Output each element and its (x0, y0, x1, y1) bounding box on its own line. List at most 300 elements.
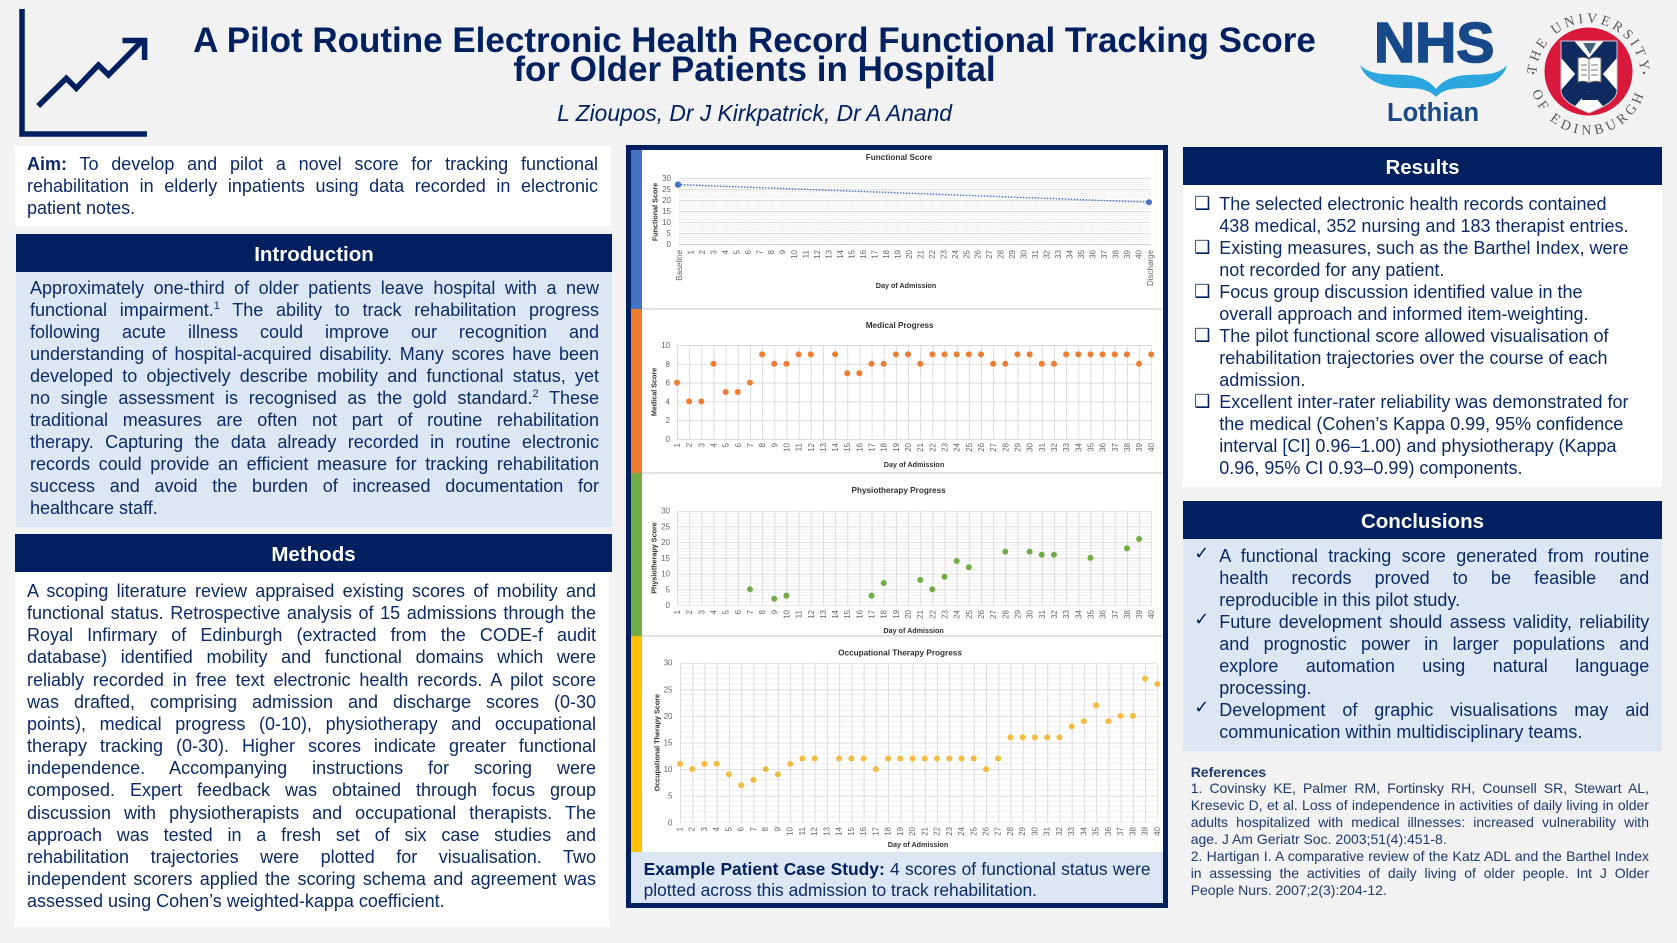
text: conclusions list: explore automation using natural language (1219, 656, 1649, 676)
x axis labels: 39 (1135, 442, 1144, 452)
x axis labels: 39 (1141, 826, 1150, 836)
axis title: day of admission: Day of Admission (884, 460, 944, 469)
x axis labels: 6 (737, 826, 746, 831)
x axis labels: 3 (697, 609, 706, 614)
x axis labels: 30 (1026, 442, 1035, 452)
chart: medical progress (631, 309, 1156, 473)
data: medical score points (674, 351, 1154, 404)
text: methods body (27, 581, 596, 911)
x axis labels: 32 (1043, 249, 1052, 259)
logo: NHS Lothian: Lothian (1387, 99, 1479, 127)
x axis labels: Baseline (675, 249, 684, 281)
panel: conclusions: ✓ (1194, 697, 1209, 718)
x axis labels: 23 (945, 826, 954, 836)
text: results list: the medical (Cohen’s Kappa 0.99, 95% confidence (1219, 414, 1623, 434)
panel: results: ❑ (1194, 280, 1210, 302)
x axis labels: 9 (773, 826, 782, 831)
x axis labels: 35 (1092, 826, 1101, 836)
x axis labels: 27 (989, 442, 998, 452)
title (193, 21, 1316, 88)
text: aim statement (27, 154, 598, 218)
text: conclusions list: Future development should assess validity, reliability (1219, 612, 1649, 632)
x axis labels: 19 (892, 442, 901, 452)
x axis labels: 1 (673, 442, 682, 447)
x axis labels: 13 (822, 826, 831, 836)
y axis labels: 30 (661, 507, 671, 516)
text: aim statement: rehabilitation in elderly inpatients using data recorded in electronic (27, 176, 598, 196)
y axis labels: 0 (666, 601, 671, 610)
x axis labels: 29 (1018, 826, 1027, 836)
x axis labels: 20 (904, 442, 913, 452)
x axis labels: 24 (953, 442, 962, 452)
x axis labels: 25 (965, 609, 974, 619)
axis title: medical score: Medical Score (650, 368, 658, 416)
x axis labels: 28 (1006, 826, 1015, 836)
y axis labels: 10 (661, 341, 671, 350)
x axis labels: 37 (1116, 826, 1125, 836)
text: conclusions list: A functional tracking score generated from routine (1219, 546, 1649, 566)
data: physiotherapy score points (747, 536, 1142, 602)
y axis labels (661, 507, 671, 610)
axis title: physiotherapy score: Physiotherapy Score (650, 522, 658, 594)
text: conclusions list: and prognostic power in larger populations and (1219, 634, 1649, 654)
x axis labels: 23 (941, 609, 950, 619)
x axis labels: 33 (1062, 442, 1071, 452)
axis title: functional score: Functional Score (650, 183, 660, 241)
axis title: day of admission: Day of Admission (888, 840, 948, 849)
text: results list: 438 medical, 352 nursing and 183 therapist entries. (1219, 216, 1629, 236)
colour strip: functional score (631, 150, 642, 309)
text: conclusions list (1194, 543, 1650, 742)
text: conclusions list: processing. (1219, 678, 1311, 698)
y axis labels: 25 (664, 685, 673, 694)
x axis labels: 9 (770, 609, 779, 614)
chart: functional score (631, 150, 1155, 309)
x axis labels: 15 (847, 826, 856, 836)
x axis labels: 3 (700, 826, 709, 831)
x axis labels: 23 (939, 249, 948, 259)
references: age. J Am Geriatr Soc. 2003;51(4):451-8. (1191, 831, 1447, 847)
x axis labels: 35 (1077, 249, 1086, 259)
text: results list: Excellent inter-rater reliability was demonstrated for (1219, 392, 1628, 412)
y axis labels: 6 (666, 379, 671, 388)
x axis labels (675, 249, 1155, 286)
y axis labels: 25 (661, 522, 671, 531)
y axis labels: 0 (667, 240, 672, 249)
text: results list: The selected electronic health records contained (1219, 194, 1607, 214)
x axis labels: 18 (880, 442, 889, 452)
y axis labels: 4 (666, 397, 671, 406)
x axis labels: 27 (985, 249, 994, 259)
text: conclusions list: communication within multidisciplinary teams. (1219, 722, 1582, 742)
text: introduction body: records could provide an efficient measure for tracking rehabilitation (30, 454, 599, 474)
x axis labels: 23 (941, 442, 950, 452)
heading: results: Results (1385, 156, 1460, 179)
x axis labels: 37 (1111, 609, 1120, 619)
x axis labels: Discharge (1146, 249, 1155, 286)
text: introduction body: Approximately one-third of older patients leave hospital with a new (30, 278, 599, 298)
x axis labels: 26 (977, 609, 986, 619)
x axis labels: 10 (782, 442, 791, 452)
x axis labels: 40 (1147, 442, 1156, 452)
x axis labels: 15 (843, 442, 852, 452)
title: A Pilot Routine Electronic Health Record Functional Tracking Score (193, 21, 1316, 60)
text: results list: interval [CI] 0.96–1.00) and physiotherapy (Kappa (1219, 436, 1617, 456)
heading: results (1183, 147, 1662, 185)
x axis labels: 7 (749, 826, 758, 831)
y axis labels: 30 (662, 174, 672, 183)
y axis labels: 2 (666, 416, 671, 425)
x axis labels: 14 (831, 442, 840, 452)
x axis labels: 11 (798, 826, 807, 835)
text: aim statement: patient notes. (27, 198, 135, 218)
x axis labels: 5 (722, 609, 731, 614)
axis title: day of admission: Day of Admission (883, 626, 944, 635)
text: methods body: therapy tracking (0-30). Higher scores indicate greater functional (27, 736, 596, 756)
text: results list: Focus group discussion identified value in the (1219, 282, 1583, 302)
data: occupational therapy score points (677, 676, 1160, 788)
x axis labels: 22 (928, 249, 937, 259)
x axis labels: 13 (824, 249, 833, 259)
x axis labels: 1 (673, 609, 682, 614)
x axis labels: 36 (1099, 442, 1108, 452)
x axis labels: 32 (1050, 442, 1059, 452)
x axis labels: 16 (855, 442, 864, 452)
x axis labels: 29 (1013, 442, 1022, 452)
x axis labels: 12 (813, 249, 822, 259)
logo: NHS Lothian: NHS (1374, 11, 1494, 75)
logo: NHS Lothian (1360, 11, 1507, 127)
x axis labels: 39 (1135, 609, 1144, 619)
x axis labels: 3 (697, 442, 706, 447)
x axis labels: 16 (859, 826, 868, 836)
x axis labels: 4 (709, 442, 718, 447)
text: results list: The pilot functional score allowed visualisation of (1219, 326, 1609, 346)
icon: rising line chart (19, 9, 148, 137)
x axis labels: 11 (795, 609, 804, 618)
x axis labels: 7 (746, 609, 755, 614)
panel: results: ❑ (1194, 236, 1210, 258)
x axis labels: 40 (1147, 609, 1156, 619)
heading: methods (15, 534, 612, 572)
chart title: medical progress: Medical Progress (866, 321, 934, 330)
heading: conclusions: Conclusions (1361, 510, 1484, 533)
references: 1. Covinsky KE, Palmer RM, Fortinsky RH, Counsell SR, Stewart AL, (1191, 780, 1649, 796)
x axis labels: 5 (732, 249, 741, 254)
authors: L Zioupos, Dr J Kirkpatrick, Dr A Anand (557, 100, 952, 126)
y axis labels: 5 (667, 229, 672, 238)
text: methods body: independence. Accompanying instructions for scoring were (27, 758, 596, 778)
x axis labels: 16 (855, 609, 864, 619)
x axis labels: 17 (868, 442, 877, 452)
text: methods body: discussion with physiotherapists and occupational therapists. The (27, 803, 596, 823)
x axis labels: 17 (868, 609, 877, 619)
x axis labels: 11 (795, 442, 804, 451)
chart title: physiotherapy progress: Physiotherapy Progress (851, 486, 946, 495)
text: conclusions list: reproducible in this pilot study. (1219, 590, 1460, 610)
x axis labels: 30 (1030, 826, 1039, 836)
x axis labels: 24 (951, 249, 960, 259)
x axis labels: 14 (836, 249, 845, 259)
x axis labels: 19 (892, 609, 901, 619)
text: introduction body: healthcare staff. (30, 498, 158, 518)
x axis labels: 19 (896, 826, 905, 836)
x axis labels: 2 (698, 249, 707, 254)
references: References (1191, 764, 1266, 780)
x axis labels: 8 (758, 442, 767, 447)
y axis labels: 15 (661, 554, 671, 563)
callout: example patient case study caption: Example Patient Case Study: 4 scores of functional status were (644, 859, 1151, 879)
x axis labels (673, 609, 1156, 619)
x axis labels: 9 (778, 249, 787, 254)
text: methods body: was drafted, comprising admission and discharge scores (0-30 (27, 692, 596, 712)
x axis labels: 4 (721, 249, 730, 254)
x axis labels: 26 (982, 826, 990, 836)
x axis labels: 18 (880, 609, 889, 619)
colour strip: occupational therapy (631, 636, 642, 852)
x axis labels: 29 (1013, 609, 1022, 619)
x axis labels: 20 (908, 826, 917, 836)
chart: occupational therapy progress (631, 636, 1162, 852)
chart title: functional score: Functional Score (866, 153, 933, 162)
x axis labels: 29 (1008, 249, 1017, 259)
text: introduction body: functional impairment.1 The ability to track rehabilitation progress (30, 300, 599, 320)
x axis labels: 8 (761, 826, 770, 831)
x axis labels: 38 (1112, 249, 1121, 259)
x axis labels: 30 (1026, 609, 1035, 619)
references (1191, 764, 1649, 898)
x axis labels: 18 (884, 826, 893, 836)
text: results list: Existing measures, such as the Barthel Index, were (1219, 238, 1628, 258)
x axis labels: 5 (724, 826, 733, 831)
references: 2. Hartigan I. A comparative review of the Katz ADL and the Barthel Index (1191, 848, 1649, 864)
x axis labels: 1 (686, 249, 695, 254)
x axis labels: 26 (977, 442, 986, 452)
x axis labels: 2 (685, 609, 694, 614)
text: results list (1194, 192, 1629, 478)
x axis labels: 38 (1123, 442, 1132, 452)
x axis labels: 5 (722, 442, 731, 447)
x axis labels: 25 (962, 249, 971, 259)
x axis labels: 36 (1104, 826, 1113, 836)
x axis labels: 15 (847, 249, 856, 259)
logo: University of Edinburgh crest (1527, 13, 1650, 134)
text: results list: 0.96, 95% CI 0.93–0.99) components. (1219, 458, 1522, 478)
x axis labels: 21 (916, 249, 925, 259)
x axis labels: 25 (969, 826, 978, 836)
title: for Older Patients in Hospital (513, 50, 996, 88)
x axis labels: 11 (801, 249, 810, 258)
x axis labels: 37 (1100, 249, 1109, 259)
text: introduction body: no single assessment is recognised as the gold standard.2 These (30, 388, 599, 408)
x axis labels: 22 (928, 609, 937, 619)
y axis labels: 30 (664, 659, 673, 668)
data: functional score trend line and points (675, 181, 1152, 205)
x axis labels (673, 442, 1156, 452)
x axis labels: 24 (957, 826, 966, 836)
text: methods body: database) identified mobility and functional domains which were (27, 647, 596, 667)
text: methods body: points), medical progress (0-10), physiotherapy and occupational (27, 714, 596, 734)
x axis labels: 27 (989, 609, 998, 619)
panel: results: ❑ (1194, 390, 1210, 412)
y axis labels: 10 (664, 765, 673, 774)
y axis labels: 20 (662, 196, 672, 205)
x axis labels: 35 (1086, 609, 1095, 619)
text: introduction body: traditional measures are often not part of routine rehabilitation (30, 410, 599, 430)
x axis labels: 25 (965, 442, 974, 452)
panel: results: ❑ (1194, 192, 1210, 214)
x axis labels: 31 (1031, 249, 1040, 259)
text: introduction body (30, 278, 599, 518)
colour strip: medical (631, 309, 642, 473)
y axis labels: 20 (664, 712, 673, 721)
x axis labels: 33 (1054, 249, 1063, 259)
x axis labels: 40 (1135, 249, 1144, 259)
x axis labels: 28 (997, 249, 1006, 259)
y axis labels: 5 (666, 585, 671, 594)
x axis labels: 14 (835, 826, 844, 836)
panel: conclusions: ✓ (1194, 609, 1209, 630)
text: introduction body: following acute illness could improve our recognition and (30, 322, 599, 342)
x axis labels: 32 (1050, 609, 1059, 619)
panel: conclusions (1183, 501, 1662, 751)
x axis labels: 7 (755, 249, 764, 254)
x axis labels: 22 (933, 826, 942, 836)
text: methods body: composed. Expert feedback was obtained through focus group (27, 780, 596, 800)
text: conclusions list: Development of graphic visualisations may aid (1219, 700, 1649, 720)
x axis labels: 12 (810, 826, 819, 836)
x axis labels: 2 (685, 442, 694, 447)
x axis labels: 20 (905, 249, 914, 259)
x axis labels: 21 (920, 826, 929, 836)
references: in assessing the activities of daily living of older people. Int J Older (1191, 865, 1649, 881)
panel: methods (15, 534, 612, 927)
x axis labels: 39 (1123, 249, 1132, 259)
y axis labels: 10 (662, 218, 672, 227)
x axis labels: 17 (870, 249, 879, 259)
x axis labels: 2 (688, 826, 697, 831)
x axis labels: 40 (1153, 826, 1162, 836)
y axis labels (662, 174, 672, 249)
panel: conclusions: ✓ (1194, 543, 1209, 564)
x axis labels: 35 (1086, 442, 1095, 452)
x axis labels: 18 (882, 249, 891, 259)
x axis labels: 21 (916, 609, 925, 619)
x axis labels: 17 (871, 826, 880, 836)
x axis labels: 22 (928, 442, 937, 452)
x axis labels: 6 (734, 609, 743, 614)
panel: example patient case study charts (626, 145, 1168, 908)
x axis labels: 12 (807, 442, 816, 452)
y axis labels (661, 341, 671, 444)
text: introduction body: developed to objectively describe mobility and functional status, yet (30, 366, 599, 386)
x axis labels: 3 (709, 249, 718, 254)
x axis labels: 34 (1079, 826, 1088, 836)
text: introduction body: therapy. Capturing the data already recorded in routine electronic (30, 432, 599, 452)
x axis labels: 28 (1001, 442, 1010, 452)
colour strip: physiotherapy (631, 473, 642, 636)
x axis labels: 28 (1001, 609, 1010, 619)
panel: results: ❑ (1194, 324, 1210, 346)
x axis labels: 34 (1074, 442, 1083, 452)
text: results list: overall approach and informed item-weighting. (1219, 304, 1588, 324)
panel: aim (15, 146, 611, 226)
x axis labels: 19 (893, 249, 902, 259)
x axis labels: 27 (994, 826, 1003, 836)
heading: conclusions (1183, 501, 1662, 539)
x axis labels: 38 (1123, 609, 1132, 619)
x axis labels: 31 (1038, 609, 1047, 619)
x axis labels: 32 (1055, 826, 1064, 836)
y axis labels: 5 (668, 792, 673, 801)
x axis labels: 14 (831, 609, 840, 619)
y axis labels: 20 (661, 538, 671, 547)
text: conclusions list: health records proved to be feasible and (1219, 568, 1649, 588)
panel: results (1183, 147, 1662, 487)
x axis labels: 34 (1074, 609, 1083, 619)
panel: introduction (16, 234, 612, 527)
x axis labels: 4 (709, 609, 718, 614)
heading: introduction (16, 234, 612, 272)
x axis labels: 13 (819, 609, 828, 619)
x axis labels: 21 (916, 442, 925, 452)
x axis labels: 38 (1128, 826, 1137, 836)
x axis labels: 10 (786, 826, 795, 836)
y axis labels: 15 (664, 738, 673, 748)
callout: example patient case study caption (631, 852, 1163, 903)
x axis labels: 36 (1089, 249, 1098, 259)
text: methods body: reliably recorded in free text electronic health records. A pilot score (27, 670, 596, 690)
x axis labels: 6 (744, 249, 753, 254)
chart title: occupational therapy progress: Occupational Therapy Progress (838, 648, 962, 658)
x axis labels: 12 (807, 609, 816, 619)
heading: introduction: Introduction (254, 243, 374, 266)
text: methods body: rehabilitation trajectories were plotted for visualisation. Two (27, 847, 596, 867)
text: methods body: A scoping literature review appraised existing scores of mobility and (27, 581, 596, 601)
x axis labels: 15 (843, 609, 852, 619)
y axis labels (664, 659, 673, 827)
logo: University of Edinburgh crest: THE UNIVERSITY (1527, 13, 1650, 73)
x axis labels: 1 (676, 826, 684, 831)
y axis labels: 0 (666, 435, 671, 444)
x axis labels: 37 (1111, 442, 1120, 452)
x axis labels: 34 (1066, 249, 1075, 259)
text: methods body: approach was tested in a fresh set of six case studies and (27, 825, 596, 845)
text: introduction body: success and avoid the burden of increased documentation for (30, 476, 599, 496)
text: results list: not recorded for any patient. (1219, 260, 1444, 280)
text: methods body: assessed using Cohen’s weighted-kappa coefficient. (27, 891, 445, 911)
y axis labels: 0 (668, 818, 673, 827)
y axis labels: 8 (666, 360, 671, 369)
y axis labels: 10 (661, 570, 671, 579)
y axis labels: 25 (662, 185, 672, 194)
x axis labels: 24 (953, 609, 962, 619)
axis title: day of admission: Day of Admission (876, 281, 936, 290)
x axis labels: 36 (1099, 609, 1108, 619)
y axis labels: 15 (662, 207, 672, 216)
callout: example patient case study caption: plotted across this admission to track rehabilitation. (644, 880, 1037, 900)
x axis labels: 6 (734, 442, 743, 447)
text: methods body: functional status. Retrospective analysis of 15 admissions through the (27, 603, 596, 623)
text: aim statement: Aim: To develop and pilot a novel score for tracking functional (27, 154, 598, 174)
x axis labels: 13 (819, 442, 828, 452)
x axis labels: 33 (1067, 826, 1076, 836)
x axis labels: 31 (1043, 826, 1052, 836)
references: adults hospitalized with medical illnesses: increased vulnerability with (1191, 814, 1649, 830)
text: introduction body: understanding of hospital-acquired disability. Many scores have been (30, 344, 599, 364)
text: results list: admission. (1219, 370, 1305, 390)
references: People Nurs. 2007;2(3):204-12. (1191, 882, 1387, 898)
